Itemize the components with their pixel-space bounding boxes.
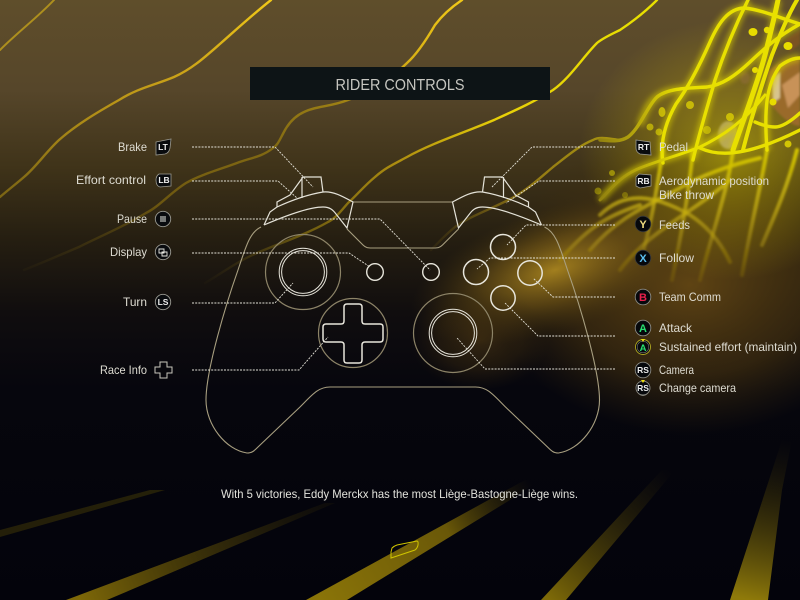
photo fragment of rider [718,30,800,149]
bright yellow lines upper right [600,0,800,200]
label: Sustained effort (maintain): A [640,343,647,354]
controller body outline [206,202,600,453]
label: Team Comm: Team Comm [659,290,721,304]
face buttons [464,234,542,310]
label: Pedal: RT [638,142,650,152]
label: Camera [635,362,694,378]
label: Pedal: Pedal [659,140,688,154]
label: Follow: Follow [659,251,694,265]
leader lines [192,147,615,370]
label: Feeds [635,216,690,232]
label: Display [110,244,171,260]
label: Aerodynamic position, Bike throw [636,174,769,202]
label: Sustained effort (maintain): Sustained effort (maintain) [659,340,797,354]
label: Pedal [636,140,688,155]
label: Feeds: Y [639,219,647,231]
right stick [414,294,492,372]
label: Attack [635,320,693,336]
bottom yellow light streaks [0,440,792,600]
glow halo of upper right lines [600,0,800,200]
label: Attack: A [639,323,647,335]
label: Brake [118,139,171,155]
label: Race Info [100,362,172,378]
d-pad [318,298,388,368]
label: Aerodynamic position, Bike throw: Bike throw [659,188,714,202]
label: Brake: Brake [118,140,147,154]
blurred lines fading lower right [560,150,797,280]
label: Display: Display [110,245,147,259]
background streak lines upper left [0,0,657,283]
label: Brake: LT [158,142,169,152]
label: Effort control: Effort control [76,173,146,187]
label: Effort control: LB [158,175,170,185]
left labels [76,139,172,378]
view and menu buttons [367,264,439,280]
label: Feeds: Feeds [659,218,690,232]
label: Turn: LS [158,297,169,307]
label: Change camera: Change camera [659,381,736,395]
left stick [266,234,340,310]
right bumper and trigger [452,177,542,228]
label: Pause: Pause [117,212,147,226]
label: Camera: Camera [659,363,694,377]
label: Change camera: RS [637,383,649,393]
label: Follow [635,250,694,266]
label: Team Comm [635,289,721,305]
label: Follow: X [639,253,647,265]
left bumper and trigger [264,177,353,228]
label: Attack: Attack [659,321,693,335]
page indicator [391,541,418,558]
title: RIDER CONTROLS [336,77,464,94]
label: Team Comm: B [639,292,647,304]
label: Turn [123,294,171,310]
label: Aerodynamic position, Bike throw: Aerodynamic position [659,174,769,188]
background glow [393,20,800,435]
label: Turn: Turn [123,295,147,309]
label: Pause [117,211,171,227]
right labels [635,140,797,396]
yellow bokeh dots [594,27,792,198]
controller [206,177,600,453]
label: Race Info: Race Info [100,363,147,377]
label: Aerodynamic position, Bike throw: RB [637,176,650,186]
label: Camera: RS [637,365,649,375]
title bar [250,67,550,100]
label: Change camera [636,380,736,396]
trivia caption: With 5 victories, Eddy Merckx has the most Liège-Bastogne-Liège wins. [221,487,578,501]
